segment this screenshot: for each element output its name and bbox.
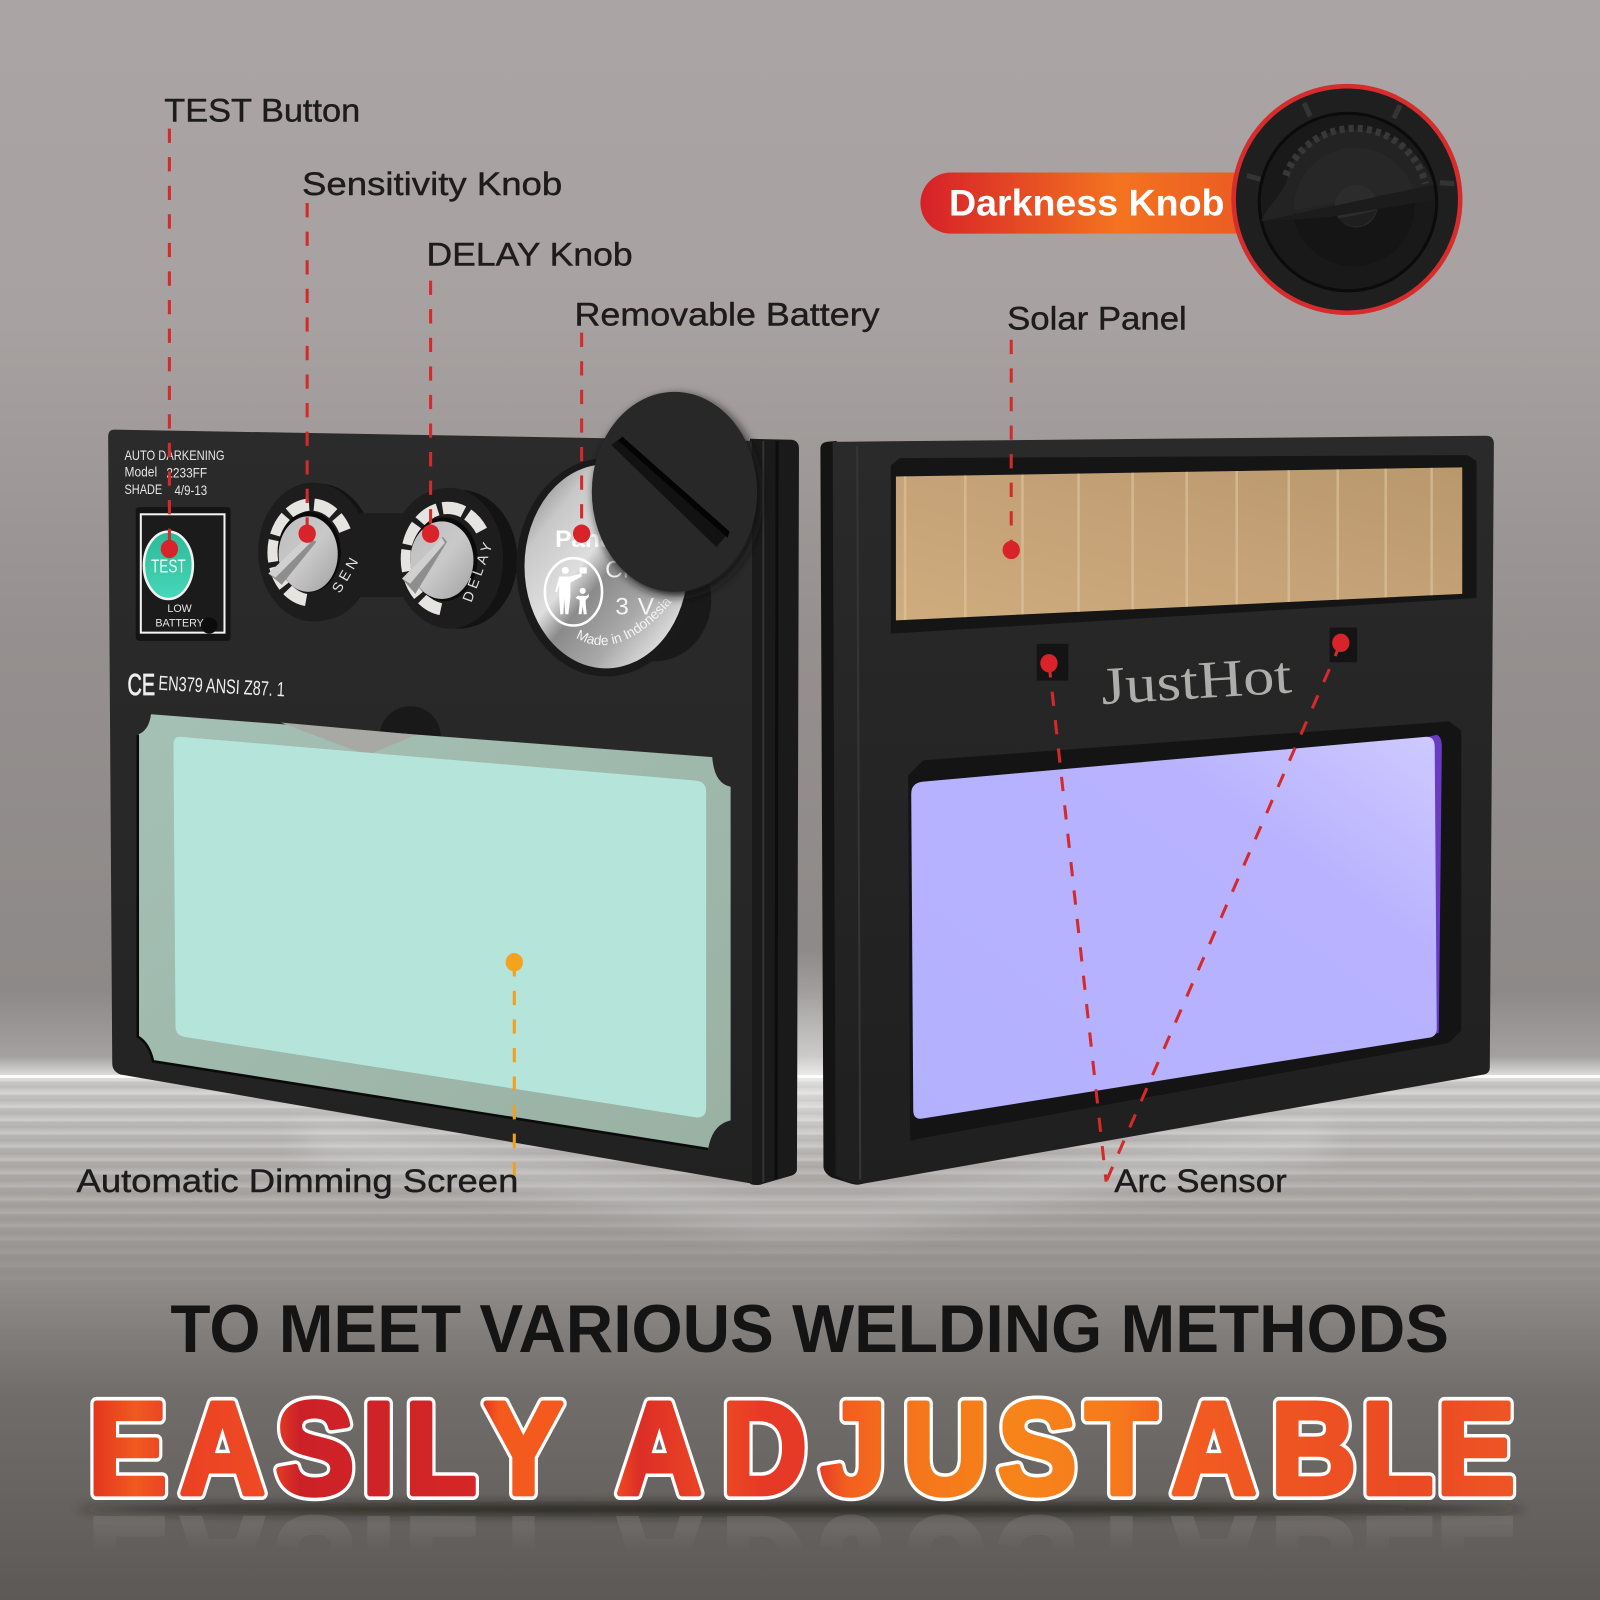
heading: to meet various welding methods: TO MEET VARIOUS WELDING METHODS — [170, 1292, 1449, 1367]
helmet side edge — [750, 439, 799, 1185]
label: DELAY Knob: DELAY Knob — [427, 235, 633, 272]
title white outline: EASILY ADJUSTABLE — [88, 1377, 1515, 1522]
brand name: JustHot — [1099, 646, 1294, 716]
battery: Made in Indonesia — [576, 598, 672, 646]
printed model text — [124, 448, 224, 498]
battery: 3 V — [615, 593, 655, 620]
TEST button panel: LOW — [167, 603, 193, 615]
printed model text: Model — [124, 465, 157, 480]
arc sensor left window — [1037, 644, 1068, 681]
label: Automatic Dimming Screen: Automatic Dimming Screen — [77, 1162, 518, 1199]
title: easily adjustable — [88, 1377, 1515, 1522]
dial base plate — [258, 483, 503, 629]
TEST button panel: TEST — [151, 555, 186, 576]
battery cap — [592, 392, 760, 596]
floor glow under helmets — [306, 1122, 1327, 1230]
adjuster hole — [380, 706, 441, 767]
certification marks: EN379 ANSI Z87. 1 — [158, 673, 285, 701]
callout: Darkness Knob: Darkness Knob — [949, 182, 1224, 223]
callout pill — [920, 172, 1250, 234]
panel: left helmet lens front — [108, 388, 799, 1185]
dial plate shadows — [265, 484, 517, 629]
printed model text: SHADE — [124, 482, 162, 497]
printed model text: AUTO DARKENING — [124, 448, 224, 463]
label: Arc Sensor: Arc Sensor — [1114, 1162, 1287, 1199]
battery — [516, 459, 711, 676]
screen recess — [908, 721, 1461, 1141]
SEN knob: SEN — [329, 552, 364, 596]
plate highlight — [856, 446, 861, 1180]
dimming screen inner lens — [173, 737, 706, 1117]
purple screen edge — [1429, 735, 1442, 1037]
marker dots — [161, 524, 1349, 971]
frame lower shadow line — [138, 735, 708, 1149]
SEN knob — [268, 505, 364, 600]
solar panel — [896, 467, 1462, 620]
battery: Pana — [555, 526, 614, 553]
dimming screen outer frame — [138, 714, 731, 1149]
leader lines — [169, 129, 1341, 1182]
certification marks — [128, 668, 285, 702]
title flame fill: EASILY ADJUSTABLE — [88, 1377, 1515, 1522]
DELAY knob — [402, 508, 498, 609]
panel: right helmet lens back — [820, 436, 1494, 1185]
icon: darkness knob — [1234, 86, 1460, 313]
helmet side edge — [820, 441, 863, 1185]
battery: CR — [605, 557, 640, 584]
DELAY knob: DELAY — [460, 537, 498, 604]
printed model text: 4/9-13 — [174, 483, 207, 498]
label: TEST Button: TEST Button — [164, 91, 360, 128]
label: Removable Battery: Removable Battery — [574, 296, 880, 333]
arc sensor right window — [1330, 628, 1357, 662]
solar panel recess — [891, 455, 1477, 634]
label: Solar Panel: Solar Panel — [1007, 300, 1187, 337]
side groove — [762, 441, 779, 1183]
helmet back plate — [833, 436, 1494, 1184]
callout: Darkness Knob — [920, 86, 1460, 313]
label: Sensitivity Knob: Sensitivity Knob — [302, 165, 562, 202]
title shadow — [77, 1503, 1526, 1515]
TEST button panel — [136, 507, 231, 641]
printed model text: 2233FF — [166, 466, 207, 481]
reflection notch — [281, 722, 416, 755]
TEST button panel: BATTERY — [155, 618, 204, 630]
leader line: dimming screen — [513, 962, 516, 1182]
helmet front plate — [108, 430, 752, 1184]
certification marks: CE — [128, 668, 155, 702]
purple lens — [911, 737, 1437, 1119]
